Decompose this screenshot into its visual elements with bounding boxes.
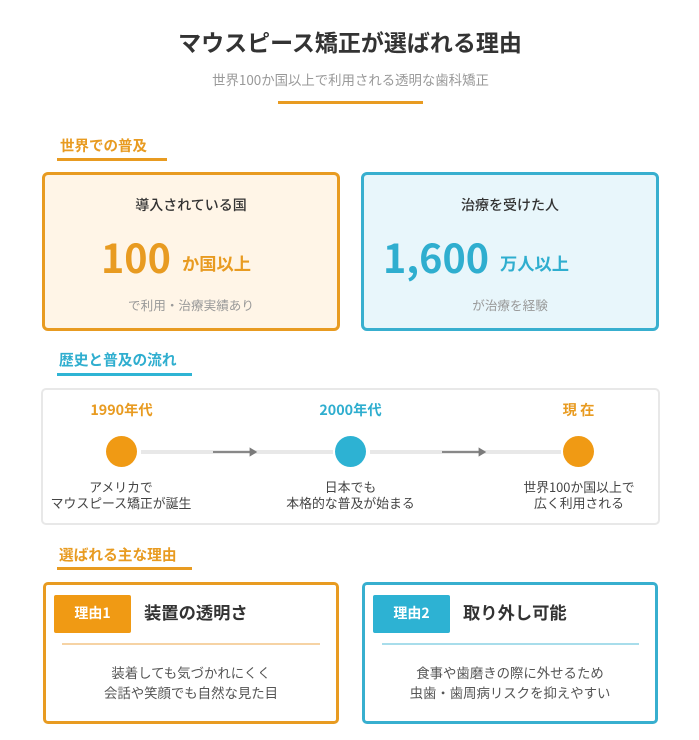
big number: 100 xyxy=(101,228,171,284)
description: 日本でも xyxy=(325,476,376,496)
panel: 導入されている国 xyxy=(42,172,340,331)
section heading: 世界での普及 xyxy=(57,134,167,161)
reason heading: 取り外し可能 xyxy=(463,598,567,624)
reason text xyxy=(104,662,278,702)
description xyxy=(51,476,191,512)
timeline connector 2 xyxy=(370,450,561,454)
reason text: 虫歯・歯周病リスクを抑えやすい xyxy=(410,682,610,702)
section heading: 選ばれる主な理由: 選ばれる主な理由 xyxy=(59,544,177,565)
badge xyxy=(373,595,450,633)
node xyxy=(106,436,137,467)
card label: 導入されている国 xyxy=(135,195,247,215)
reason text: 会話や笑顔でも自然な見た目 xyxy=(104,682,278,702)
description xyxy=(286,476,415,512)
milestone: 2000年代 xyxy=(286,399,415,512)
section heading: 世界での普及: 世界での普及 xyxy=(60,135,147,156)
card note: が治療を経験 xyxy=(472,295,548,314)
year: 1990年代 xyxy=(90,399,153,420)
panel: 治療を受けた人 xyxy=(361,172,659,331)
title underline xyxy=(278,101,423,104)
panel: 理由2 xyxy=(362,582,658,724)
badge: 理由2 xyxy=(393,603,430,623)
section heading: 選ばれる主な理由 xyxy=(57,543,192,570)
description: 広く利用される xyxy=(534,493,624,512)
big number: 1,600 xyxy=(383,228,489,284)
reason text: 食事や歯磨きの際に外せるため xyxy=(416,662,604,682)
node xyxy=(563,436,594,467)
section heading: 歴史と普及の流れ xyxy=(57,348,192,376)
badge: 理由1 xyxy=(74,603,111,623)
divider xyxy=(62,643,320,645)
card label: 治療を受けた人 xyxy=(461,195,559,215)
milestone: 1990年代 xyxy=(51,399,191,512)
reason text: 装着しても気づかれにくく xyxy=(111,662,271,682)
description: アメリカで xyxy=(89,476,153,496)
description: 世界100か国以上で xyxy=(523,476,635,496)
milestone: 現在 xyxy=(523,399,635,512)
title: マウスピース矯正が選ばれる理由 xyxy=(178,24,522,58)
description xyxy=(523,476,635,512)
panel: 理由1 xyxy=(43,582,339,724)
year: 2000年代 xyxy=(319,399,382,420)
card note: で利用・治療実績あり xyxy=(128,295,254,314)
node xyxy=(335,436,366,467)
badge xyxy=(54,595,131,633)
unit: か国以上 xyxy=(182,250,251,275)
subtitle: 世界100か国以上で利用される透明な歯科矯正 xyxy=(212,69,489,89)
arrow 2 xyxy=(442,448,486,456)
unit: 万人以上 xyxy=(500,250,569,275)
timeline connector 1 xyxy=(141,450,333,454)
reason text xyxy=(410,662,610,702)
description: マウスピース矯正が誕生 xyxy=(51,493,191,512)
reason heading: 装置の透明さ xyxy=(144,598,248,624)
arrow 1 xyxy=(213,448,257,456)
panel: timeline xyxy=(41,388,660,525)
year: 現 在 xyxy=(563,399,594,420)
section heading: 歴史と普及の流れ: 歴史と普及の流れ xyxy=(59,349,177,370)
divider xyxy=(382,643,639,645)
description: 本格的な普及が始まる xyxy=(286,493,415,512)
